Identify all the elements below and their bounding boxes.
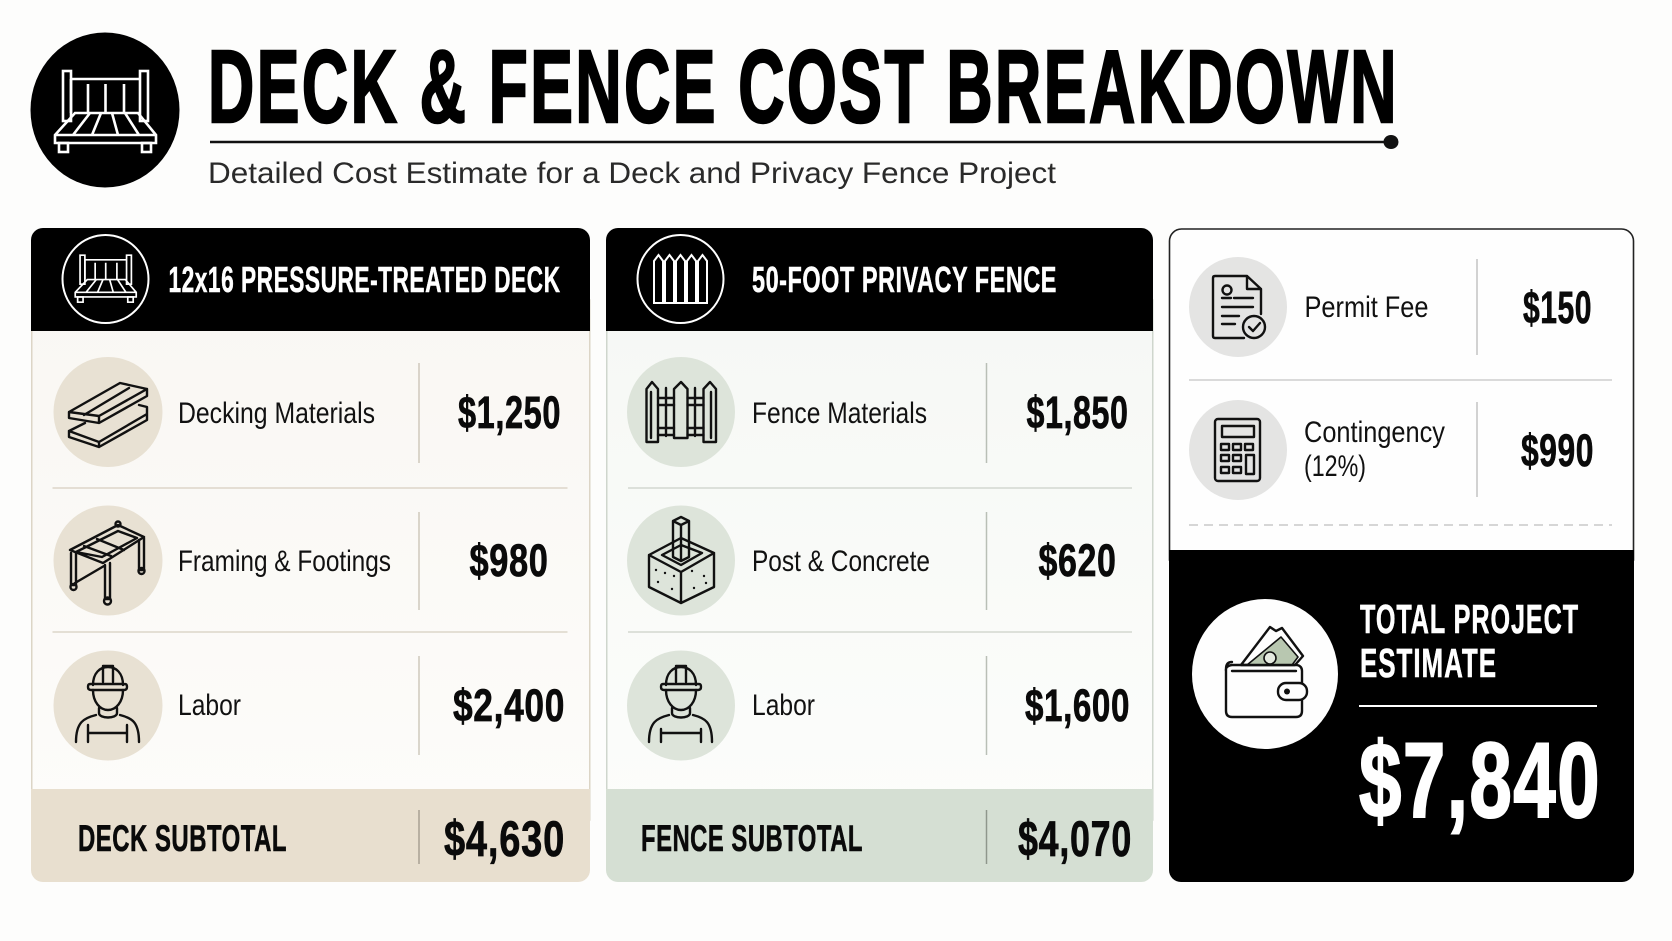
label: Framing & Footings	[178, 545, 391, 578]
subtotal value: $4,070	[1018, 811, 1132, 867]
subtotal label: FENCE SUBTOTAL	[641, 818, 863, 859]
subtotal label: DECK SUBTOTAL	[78, 818, 287, 859]
value: $990	[1521, 425, 1594, 476]
label: Decking Materials	[178, 397, 375, 430]
label: Contingency	[1304, 416, 1445, 449]
icon: worker	[54, 650, 162, 760]
row: permit fee	[1189, 257, 1592, 357]
panel: deck costs	[31, 228, 590, 882]
icon: fence outline	[638, 235, 724, 323]
icon: wallet with cash	[1192, 599, 1338, 749]
icon: fence pickets	[627, 357, 735, 467]
icon: deck frame	[54, 506, 162, 616]
value: $980	[470, 535, 548, 586]
icon: worker	[627, 650, 735, 760]
value: $620	[1038, 535, 1116, 586]
fence panel heading: 50-FOOT PRIVACY FENCE	[752, 259, 1057, 300]
icon: post in concrete	[627, 506, 735, 616]
row: contingency	[1189, 400, 1594, 500]
panel: fence costs	[606, 228, 1153, 882]
row: framing and footings	[54, 506, 548, 616]
total label: ESTIMATE	[1360, 640, 1497, 686]
deck subtotal band	[31, 789, 590, 882]
label: Post & Concrete	[752, 545, 930, 578]
row: fence labor	[627, 650, 1130, 760]
label: Permit Fee	[1304, 291, 1428, 324]
row: contingency: (12%)	[1304, 450, 1366, 483]
value: $1,850	[1026, 387, 1128, 438]
row: fence materials	[627, 357, 1128, 467]
subtotal value: $4,630	[444, 811, 565, 867]
total estimate block	[1169, 550, 1634, 882]
deck panel body	[32, 300, 590, 820]
fence subtotal band	[606, 789, 1153, 882]
deck panel header	[31, 228, 590, 331]
label: Fence Materials	[752, 397, 927, 430]
icon: permit document	[1189, 257, 1287, 357]
value: $1,250	[458, 387, 561, 438]
label: Labor	[178, 689, 241, 722]
deck panel heading: 12x16 PRESSURE-TREATED DECK	[168, 259, 560, 300]
fence panel body	[607, 300, 1153, 820]
value: $1,600	[1025, 680, 1130, 731]
value: $150	[1523, 282, 1592, 333]
total label	[1360, 596, 1579, 686]
row: deck labor	[54, 650, 565, 760]
subtitle: Detailed Cost Estimate for a Deck and Privacy Fence Project	[208, 157, 1057, 190]
title underline with end dot	[210, 135, 1398, 149]
label: Labor	[752, 689, 815, 722]
logo: deck icon in black circle	[30, 32, 180, 188]
row: post and concrete	[627, 506, 1116, 616]
row: decking materials	[54, 357, 561, 467]
icon: lumber boards	[54, 357, 162, 467]
icon: calculator	[1189, 400, 1287, 500]
additional costs card	[1170, 229, 1634, 560]
value: $2,400	[453, 680, 565, 731]
panel: additional costs and total	[1169, 229, 1634, 882]
total divider	[1359, 705, 1597, 707]
icon: deck outline	[62, 235, 148, 323]
fence panel header	[606, 228, 1153, 331]
